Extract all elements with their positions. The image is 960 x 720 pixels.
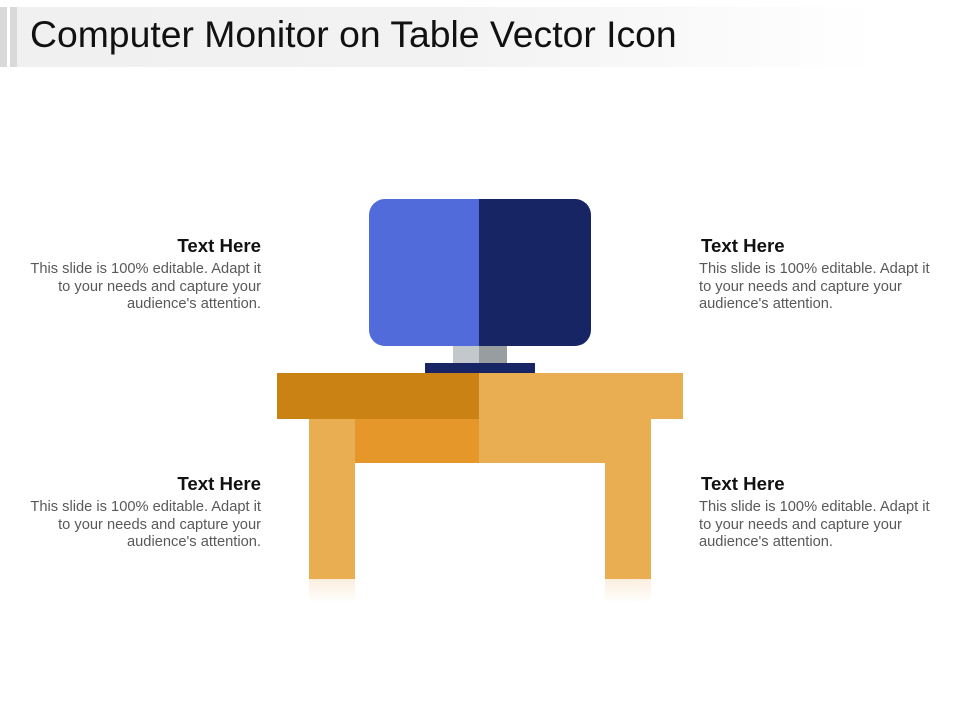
body text: audience's attention.	[127, 534, 261, 550]
body text: audience's attention.	[699, 534, 833, 550]
heading: Text Here	[177, 473, 261, 494]
body text	[30, 261, 261, 312]
body text: to your needs and capture your	[699, 279, 902, 295]
icon: monitor stand	[425, 346, 535, 373]
leg reflections	[309, 579, 651, 603]
body text: This slide is 100% editable. Adapt it	[699, 261, 930, 277]
body text: This slide is 100% editable. Adapt it	[30, 499, 261, 515]
text block: bottom left	[30, 473, 261, 550]
body text: This slide is 100% editable. Adapt it	[699, 499, 930, 515]
text block: bottom right	[699, 473, 930, 550]
body text: to your needs and capture your	[58, 279, 261, 295]
title bar	[0, 7, 677, 67]
body text: to your needs and capture your	[699, 517, 902, 533]
icon: table	[277, 373, 683, 579]
title: Computer Monitor on Table Vector Icon	[30, 13, 677, 55]
heading: Text Here	[701, 473, 785, 494]
body text	[699, 499, 930, 550]
body text: audience's attention.	[127, 296, 261, 312]
text block: top right	[699, 235, 930, 312]
text block: top left	[30, 235, 261, 312]
body text	[699, 261, 930, 312]
heading: Text Here	[701, 235, 785, 256]
body text: This slide is 100% editable. Adapt it	[30, 261, 261, 277]
icon: monitor screen	[369, 199, 591, 346]
body text: to your needs and capture your	[58, 517, 261, 533]
body text	[30, 499, 261, 550]
body text: audience's attention.	[699, 296, 833, 312]
heading: Text Here	[177, 235, 261, 256]
